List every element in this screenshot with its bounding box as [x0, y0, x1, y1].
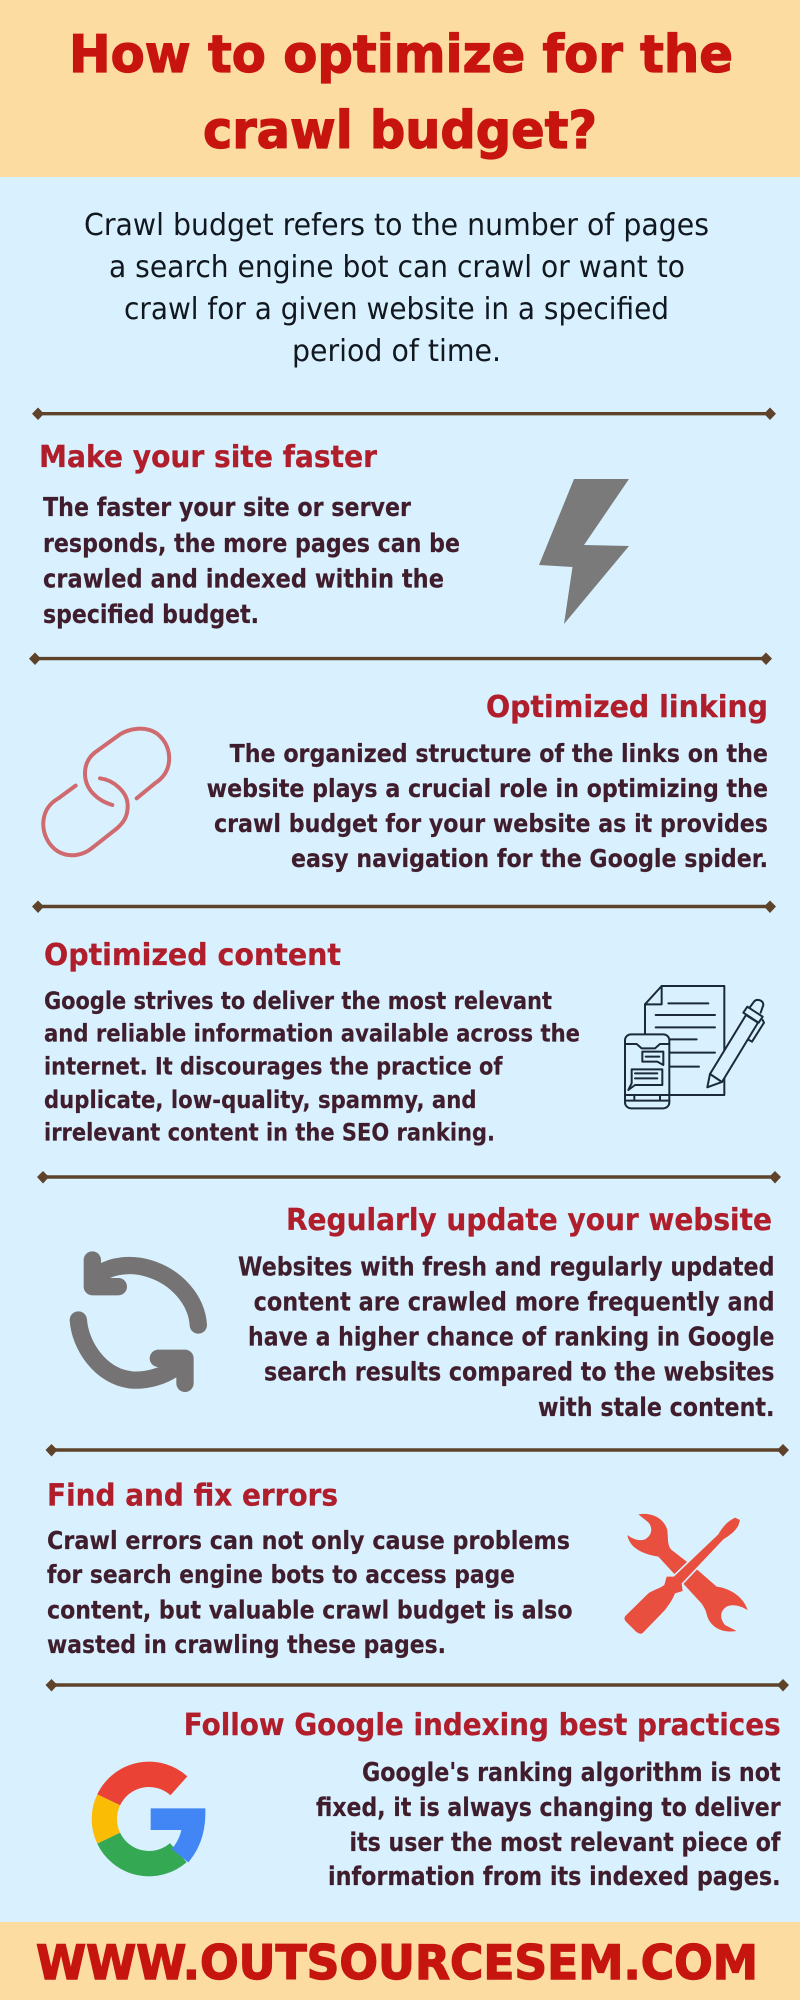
panel: follow google indexing best practices	[104, 1708, 781, 1892]
header band	[0, 0, 800, 177]
heading: optimized linking: Optimized linking	[486, 690, 768, 725]
panel: optimized linking	[43, 690, 768, 873]
footer band	[0, 1922, 800, 2000]
body text: find and fix errors: wasted in crawling these pages.	[47, 1630, 446, 1659]
body text: optimized content: Google strives to deliver the most relevant	[44, 987, 552, 1015]
panel: find and fix errors	[47, 1479, 748, 1659]
icon: wrench and screwdriver	[624, 1514, 748, 1634]
body text: follow google indexing best practices	[316, 1758, 781, 1892]
panel: make your site faster	[39, 440, 629, 630]
icon: document, phone and pen	[625, 986, 764, 1108]
heading: find and fix errors: Find and fix errors	[47, 1479, 338, 1514]
panel: optimized content	[44, 938, 764, 1147]
body text: optimized content	[44, 987, 580, 1147]
icon: lightning bolt	[539, 479, 629, 624]
title	[69, 25, 733, 161]
title: How to optimize for the	[69, 25, 733, 85]
footer website address: WWW.OUTSOURCESEM.COM	[36, 1936, 758, 1991]
body text: optimized content: irrelevant content in the SEO ranking.	[44, 1119, 495, 1147]
body text: optimized content: and reliable information available across the	[44, 1020, 580, 1048]
body text: make your site faster: specified budget.	[43, 600, 259, 630]
body text: find and fix errors: Crawl errors can not only cause problems	[47, 1526, 570, 1555]
heading: optimized content: Optimized content	[44, 938, 341, 973]
heading: regularly update your website: Regularly update your website	[286, 1203, 772, 1238]
icon: chain link	[43, 729, 169, 855]
icon: google G	[104, 1774, 205, 1864]
panel: regularly update your website	[78, 1203, 775, 1423]
intro text	[84, 208, 709, 369]
body text: make your site faster: crawled and indexed within the	[43, 564, 444, 594]
body text: make your site faster	[43, 493, 460, 630]
body text: optimized content: duplicate, low-quality, spammy, and	[44, 1086, 476, 1114]
body text: find and fix errors	[47, 1526, 572, 1659]
body text: find and fix errors: content, but valuable crawl budget is also	[47, 1596, 572, 1625]
title: crawl budget?	[203, 101, 597, 161]
body text: make your site faster: responds, the more pages can be	[43, 529, 460, 559]
icon: refresh arrows	[78, 1260, 198, 1383]
intro text: crawl for a given website in a specified	[124, 292, 669, 327]
intro text: Crawl budget refers to the number of pages	[84, 208, 709, 243]
body text: optimized content: internet. It discourages the practice of	[44, 1053, 503, 1081]
body text: regularly update your website	[238, 1253, 775, 1423]
body text: find and fix errors: for search engine bots to access page	[47, 1560, 515, 1589]
intro text: a search engine bot can crawl or want to	[109, 250, 685, 285]
heading: make your site faster: Make your site faster	[39, 440, 377, 475]
intro text: period of time.	[292, 334, 501, 369]
body text: make your site faster: The faster your site or server	[43, 493, 411, 523]
body text: optimized linking	[207, 739, 768, 873]
